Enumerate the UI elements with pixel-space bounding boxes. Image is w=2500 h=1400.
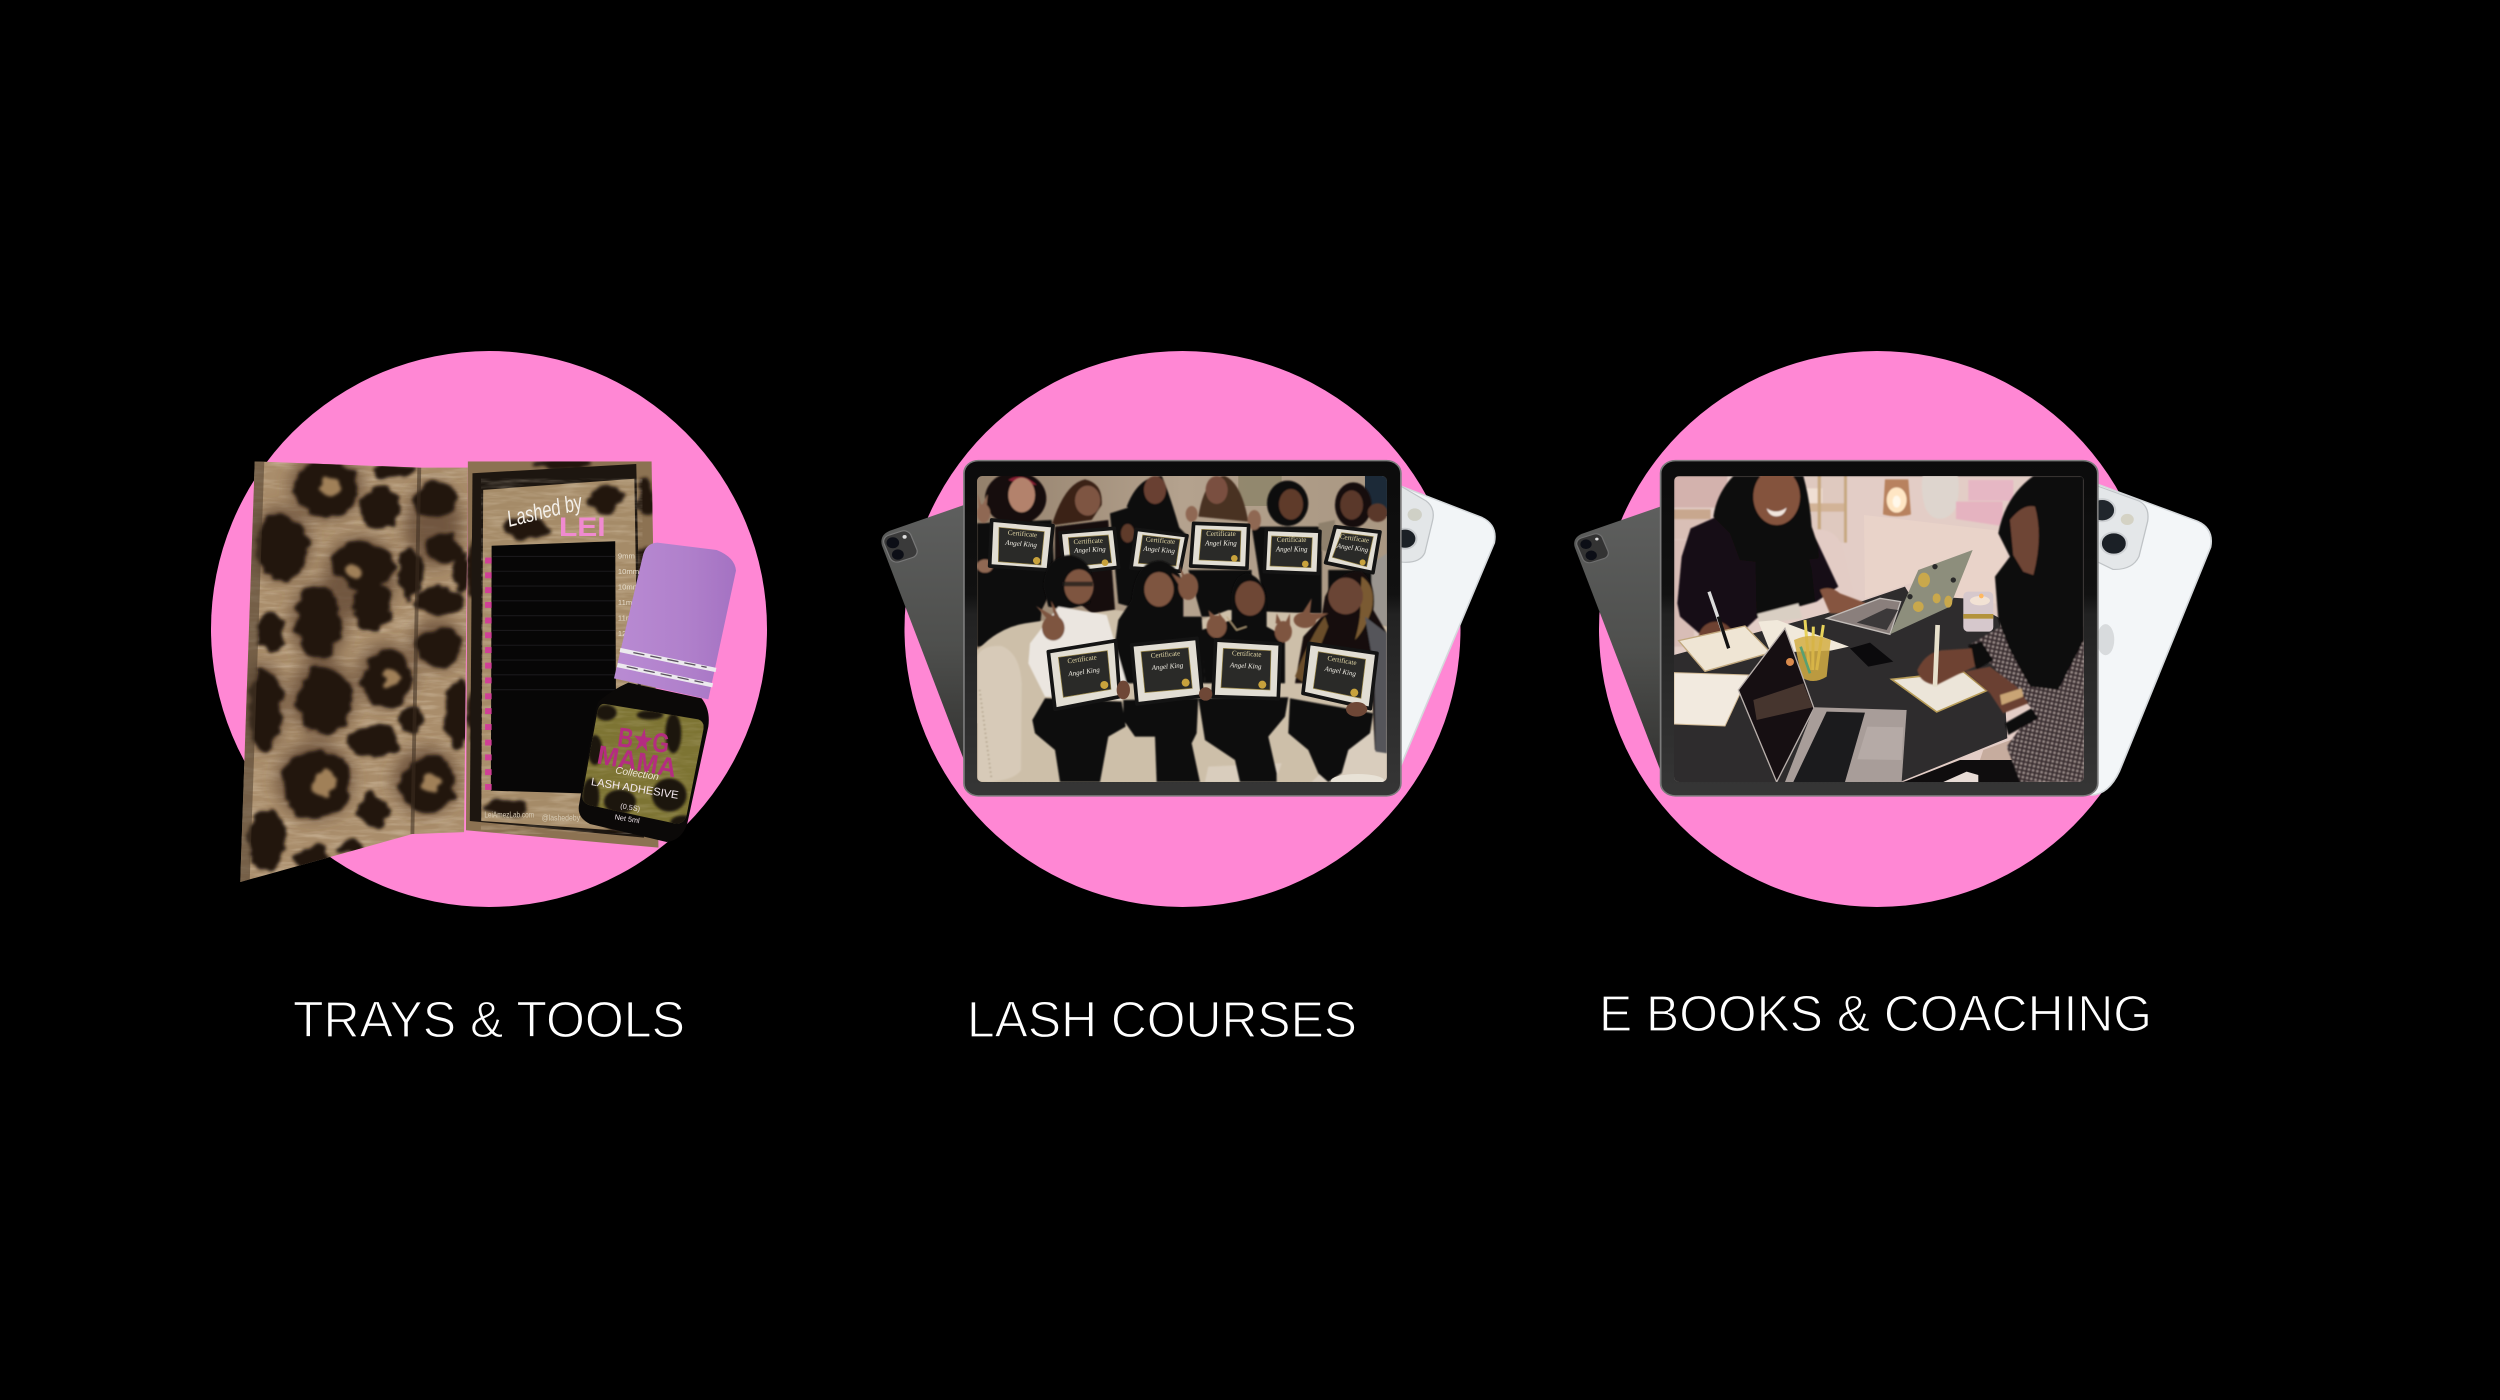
bottle label text: MAMA: [595, 740, 679, 783]
lash row dividers: [493, 556, 615, 690]
pink circle two: [904, 351, 1460, 907]
certificate four: Angel King: [1204, 539, 1237, 547]
room background: [977, 476, 1387, 783]
certificate three: Angel King: [1142, 545, 1176, 555]
front tablet: [1661, 461, 2098, 796]
tray brand text: @lashedeby: [542, 813, 581, 822]
label: e books and coaching: E BOOKS & COACHING: [1599, 985, 2152, 1042]
certificate three: Certificate: [1145, 535, 1176, 546]
holding hands: [1117, 681, 1367, 717]
pen holder: [1794, 620, 1831, 681]
certificate six: Certificate: [1339, 533, 1370, 545]
certificate one: Angel King: [1004, 539, 1038, 549]
woman one: [1043, 555, 1092, 610]
lash strips block: [491, 541, 616, 794]
certificate ten: Angel King: [1323, 664, 1357, 678]
tablet camera: [881, 529, 919, 564]
certificate seven: Certificate: [1067, 653, 1097, 665]
certificate two: Angel King: [1073, 545, 1106, 555]
silver bands: [617, 650, 716, 685]
pink length markers: [485, 558, 492, 790]
back tablet: [1574, 506, 1661, 771]
back phone: [1394, 486, 1495, 766]
bottle body: [579, 683, 709, 842]
panel: lash courses: [881, 351, 1495, 1048]
notebooks: [1674, 620, 1987, 726]
tray brand text: 11mm: [618, 598, 639, 607]
phone on table: [1850, 643, 1893, 667]
tray brand text: 11mm: [618, 614, 639, 622]
course group photo: [977, 472, 1388, 787]
bottle label text: LASH ADHESIVE: [590, 776, 679, 802]
certificate four: [1191, 523, 1249, 568]
woman two: [1115, 561, 1205, 683]
certificate seven: Angel King: [1067, 666, 1101, 678]
tray brand text: Lashed by: [504, 489, 586, 532]
women hair and faces: [984, 476, 1372, 528]
front row legs: [1032, 697, 1373, 782]
certificate nine: Certificate: [1232, 649, 1262, 659]
adhesive bottle: [578, 543, 736, 842]
label: lash courses: LASH COURSES: [967, 991, 1357, 1048]
phone logo: [2097, 624, 2114, 655]
panel: e books and coaching: [1574, 351, 2211, 1042]
purple cap: [614, 543, 736, 699]
device mockup: [881, 461, 1495, 796]
flowers: [1330, 774, 1384, 782]
back tablet: [881, 505, 964, 760]
lash tray: [234, 453, 663, 888]
certificate eight: Certificate: [1150, 649, 1181, 660]
bottle label text: Net 5ml: [614, 812, 641, 825]
front row certificates: [1048, 638, 1377, 709]
back laptop: [1827, 550, 1973, 634]
tray brand text: 12mm: [618, 629, 639, 638]
seated woman right: [1917, 476, 2084, 782]
certificate nine: [1213, 640, 1280, 699]
under table area: [1903, 737, 2027, 782]
certificate two: [1062, 526, 1117, 570]
tray brand text: LeiAmezLab.com: [484, 810, 534, 819]
tray brand text: LEI: [559, 512, 606, 542]
open leopard lid: [234, 453, 472, 888]
room background: [1674, 476, 2084, 782]
woman four: [1295, 572, 1387, 753]
candle: [1963, 592, 1993, 632]
certificate eight: Angel King: [1150, 661, 1184, 672]
tray brand text: 9mm: [618, 551, 635, 560]
back phone: [2089, 484, 2211, 795]
certificate five: Certificate: [1277, 536, 1306, 544]
certificate ten: [1303, 643, 1377, 709]
certificate six: [1326, 527, 1380, 573]
writing pen right: [1935, 625, 1938, 687]
bottle label text: Collection: [615, 765, 660, 783]
tray brand text: [484, 489, 639, 822]
certificate one: [990, 520, 1053, 570]
certificate five: [1264, 529, 1320, 574]
phone camera bump: [2089, 486, 2148, 569]
bottle label: [582, 704, 704, 824]
certificate ten: Certificate: [1327, 654, 1357, 667]
writing pens: [1709, 592, 1729, 648]
bottle label text: [590, 721, 679, 825]
device mockup: [1574, 461, 2211, 796]
certificate two: Certificate: [1073, 537, 1103, 546]
bottle label text: (0.5S): [620, 801, 641, 813]
tray brand text: 10mm: [618, 582, 639, 591]
phone camera bump: [1394, 486, 1433, 562]
pink circle three: [1599, 351, 2155, 907]
seated woman left: [1677, 468, 1867, 655]
certificate nine: Angel King: [1229, 661, 1262, 671]
front laptop: [1738, 628, 1907, 782]
woman three: [1202, 573, 1285, 683]
certificate four: Certificate: [1206, 530, 1236, 538]
certificate three: [1131, 529, 1187, 571]
front tablet: [964, 461, 1401, 796]
sofa: [977, 610, 1387, 783]
certificate eight: [1132, 638, 1202, 704]
table: [1674, 587, 2007, 782]
tray box with lash card: [464, 458, 663, 851]
certificate one: Certificate: [1007, 529, 1038, 539]
side cabinet: [1864, 515, 2007, 603]
peace hands: [1036, 598, 1328, 642]
lamp, vase and boxes: [1883, 476, 2013, 526]
tablet camera: [1575, 532, 1610, 564]
pink circle one: [211, 351, 767, 907]
front row women: [1028, 555, 1387, 753]
panel: trays and tools: [211, 351, 767, 1048]
tray brand text: 10mm: [618, 567, 639, 576]
bottle label text: B★G: [616, 721, 671, 759]
label: trays and tools: TRAYS & TOOLS: [293, 991, 685, 1048]
certificate five: Angel King: [1275, 545, 1308, 553]
coaching photo: [1674, 468, 2084, 782]
certificate seven: [1048, 641, 1120, 709]
back row certificates: [990, 520, 1380, 574]
certificate six: Angel King: [1335, 542, 1369, 554]
raised hands: [977, 493, 1388, 573]
back row women: [977, 472, 1388, 647]
